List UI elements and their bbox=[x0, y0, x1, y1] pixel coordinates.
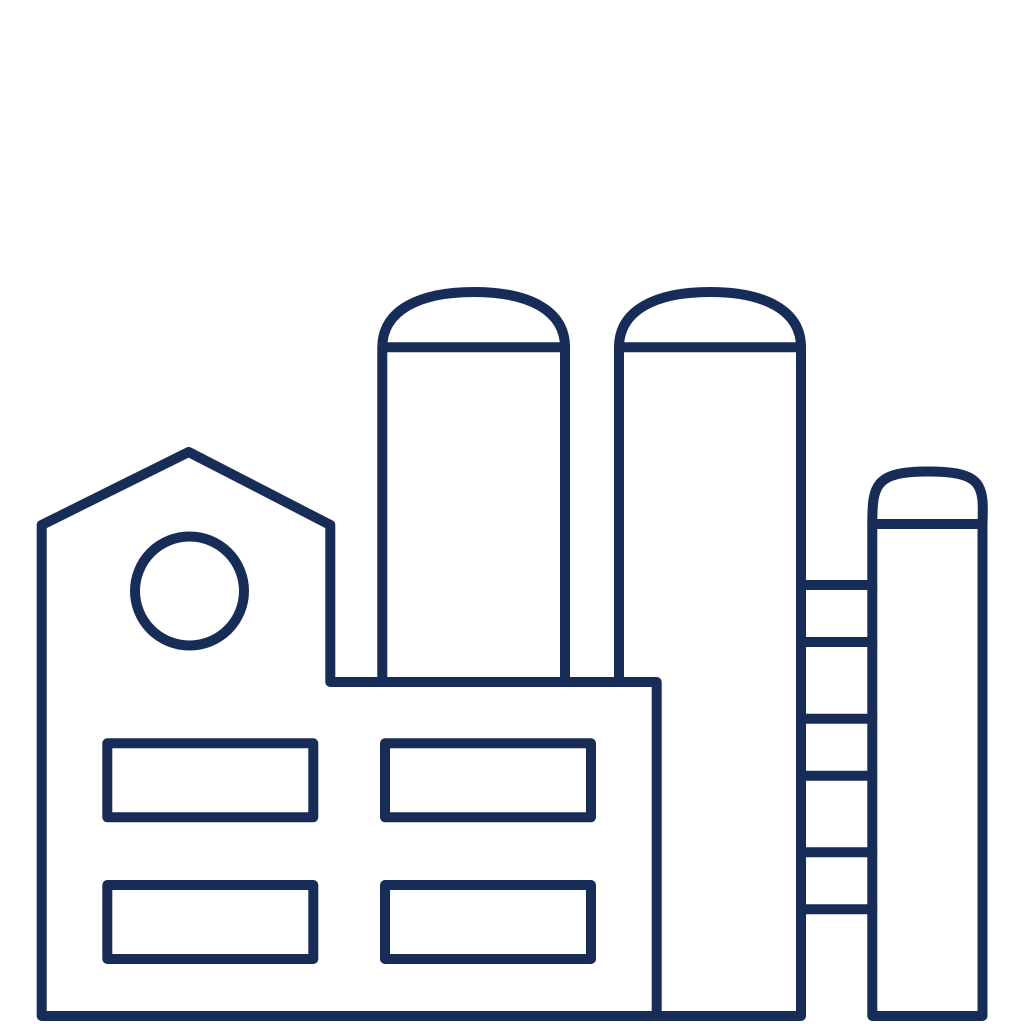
first silo bbox=[382, 292, 565, 682]
ladder rungs between silos bbox=[801, 585, 872, 909]
factory windows bbox=[107, 743, 591, 959]
factory building outline bbox=[42, 452, 657, 1016]
second silo bbox=[619, 292, 801, 1016]
factory round window bbox=[135, 536, 244, 646]
third small silo bbox=[872, 472, 983, 1016]
